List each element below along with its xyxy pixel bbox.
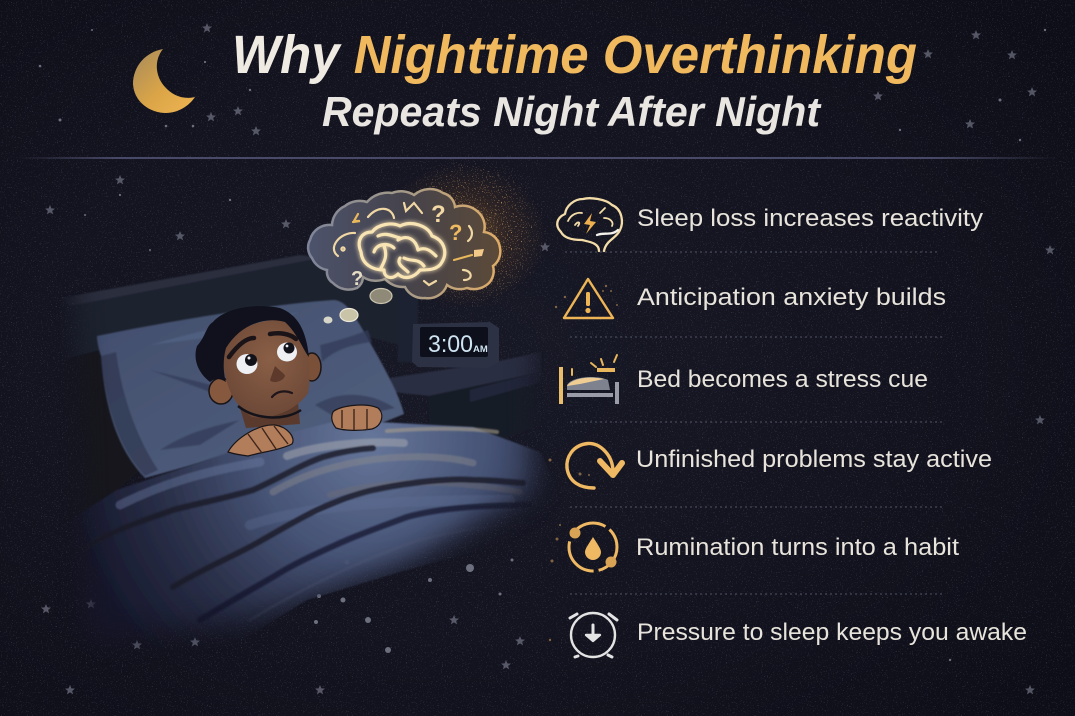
right eyebrow <box>270 333 296 339</box>
jaw line <box>238 406 301 417</box>
nose <box>270 366 285 382</box>
mouth <box>272 391 292 397</box>
label: anticipation: Anticipation anxiety builds <box>637 284 946 311</box>
title line two: Repeats Night After Night <box>322 88 822 135</box>
neck <box>240 402 300 428</box>
left ear <box>209 378 233 404</box>
icon: ring with drop <box>569 523 617 571</box>
hair <box>196 306 309 382</box>
clock meridiem: AM <box>473 344 488 355</box>
label: bed: Bed becomes a stress cue <box>637 366 928 393</box>
person's head <box>196 306 321 428</box>
label: unfinished problems: Unfinished problems stay active <box>636 446 992 473</box>
item: unfinished problems <box>567 443 992 488</box>
glowing brain <box>359 224 445 277</box>
right ear <box>308 352 322 382</box>
thought doodles <box>334 203 472 285</box>
left hand <box>228 425 293 456</box>
icon: crescent moon <box>133 49 195 113</box>
list of causes <box>557 198 1027 657</box>
icon: bed with stress lines <box>559 355 619 404</box>
header divider <box>15 157 1060 159</box>
question marks: ? <box>449 220 462 245</box>
left eye <box>236 354 258 374</box>
clock screen <box>420 327 488 357</box>
clock body <box>412 322 499 368</box>
headboard and wall <box>68 254 418 512</box>
cloud shape <box>308 189 500 298</box>
label: rumination: Rumination turns into a habit <box>636 534 959 561</box>
title line one: Why Nighttime Overthinking <box>232 25 917 85</box>
item: rumination <box>569 523 959 571</box>
question marks: ? <box>431 201 446 228</box>
face <box>222 320 310 417</box>
hand finger lines <box>248 409 367 453</box>
clock time: 3:00 <box>428 331 473 358</box>
illustration: person in bed at 3 AM <box>68 254 545 649</box>
item: bed <box>559 355 928 404</box>
icon: looping arrow <box>567 443 622 488</box>
gold dust near icons <box>548 285 618 641</box>
label: pressure to sleep: Pressure to sleep keeps you awake <box>637 619 1027 646</box>
right eye <box>277 342 297 362</box>
blanket <box>80 422 545 649</box>
digital alarm clock <box>412 322 499 368</box>
thought bubble <box>308 189 500 324</box>
icon: alarm clock <box>570 613 617 657</box>
thought trail bubbles <box>324 288 392 324</box>
question marks <box>351 201 462 290</box>
icon: brain with lightning bolt <box>557 198 622 251</box>
title <box>232 25 917 135</box>
nightstand <box>390 352 541 440</box>
item: anticipation <box>564 279 946 318</box>
lightning bolt <box>584 213 596 234</box>
golden glow and specks around thought <box>377 154 548 310</box>
left eyebrow <box>229 338 254 357</box>
icon: warning triangle <box>564 279 613 318</box>
right hand <box>332 405 382 430</box>
item: pressure to sleep <box>570 613 1027 657</box>
item: sleep loss <box>557 198 983 251</box>
arrowhead doodle <box>474 249 484 257</box>
label: sleep loss: Sleep loss increases reactivity <box>637 205 983 232</box>
question marks: ? <box>351 268 363 290</box>
pillow <box>97 300 404 478</box>
